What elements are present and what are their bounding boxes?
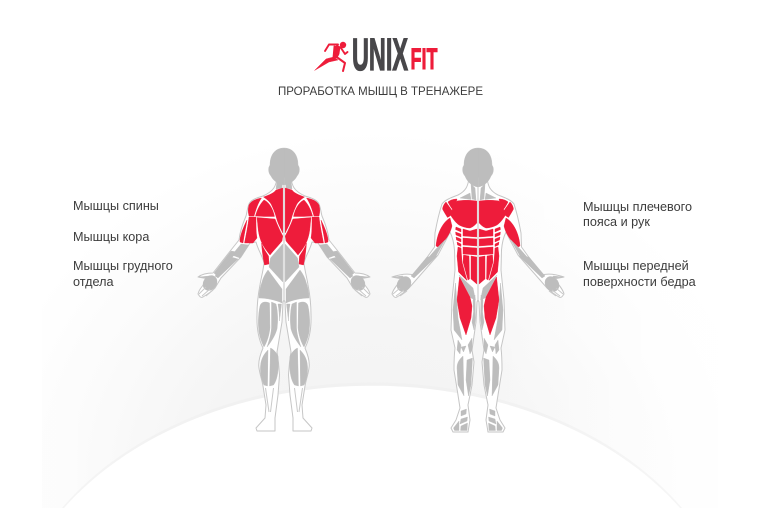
label: thoracic: отдела <box>73 275 114 289</box>
left labels: back muscles <box>73 199 173 289</box>
subtitle: ПРОРАБОТКА МЫШЦ В ТРЕНАЖЕРЕ <box>278 86 483 98</box>
label: front thigh: Мышцы передней <box>583 259 689 273</box>
label: shoulder girdle and arms: пояса и рук <box>583 215 650 229</box>
wordmark FIT: FIT <box>410 43 438 76</box>
logo: UNIX FIT <box>314 29 438 80</box>
background dome <box>42 120 718 508</box>
figure: back view <box>198 148 370 431</box>
icon: red runner <box>314 42 348 71</box>
figure: front view <box>392 148 564 432</box>
label: back: Мышцы спины <box>73 199 159 213</box>
wordmark UNIX: UNIX <box>352 29 408 80</box>
label: thoracic: Мышцы грудного <box>73 259 173 273</box>
right labels: front muscles <box>583 200 697 289</box>
label: shoulder girdle and arms: Мышцы плечевого <box>583 200 692 214</box>
label: core: Мышцы кора <box>73 230 150 244</box>
label: front thigh: поверхности бедра <box>583 275 697 289</box>
